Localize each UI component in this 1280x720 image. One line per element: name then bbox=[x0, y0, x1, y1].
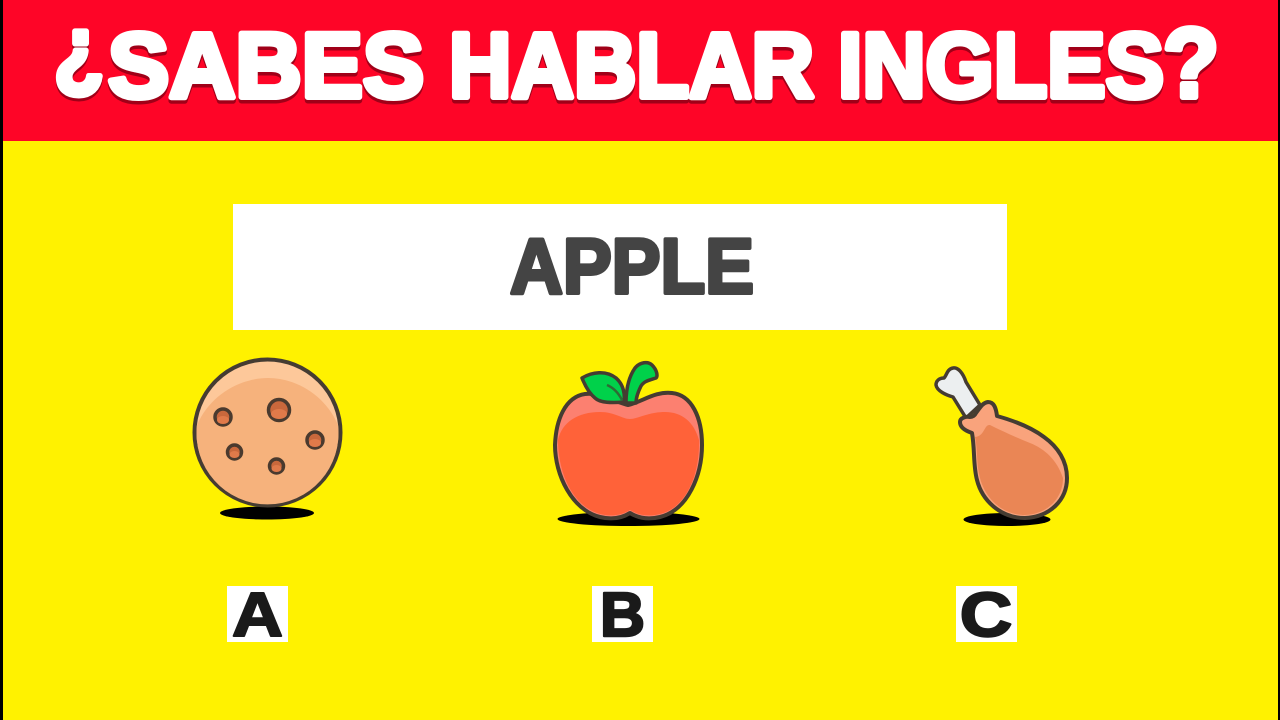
title shadow bbox=[54, 1, 1219, 122]
drumstick bbox=[960, 402, 1067, 518]
bone bbox=[936, 368, 980, 418]
option B: apple icon bbox=[555, 363, 702, 526]
word panel bbox=[233, 204, 1007, 330]
option label B: B bbox=[600, 581, 645, 650]
title shadow: ¿ bbox=[54, 1, 104, 103]
title: INGLES bbox=[838, 15, 1164, 117]
option C: chicken leg icon bbox=[936, 368, 1067, 526]
title shadow: ? bbox=[1163, 12, 1219, 122]
cookie chips bbox=[215, 400, 323, 473]
apple body bbox=[555, 393, 702, 518]
title: ¿ bbox=[54, 0, 104, 100]
word: APPLE: APPLE bbox=[510, 222, 754, 310]
title: HABLAR bbox=[449, 15, 814, 117]
title shadow: INGLES bbox=[838, 18, 1164, 120]
title: SABES bbox=[108, 15, 424, 117]
option label C: C bbox=[960, 581, 1012, 650]
option A: cookie icon bbox=[194, 360, 340, 520]
header banner bbox=[3, 0, 1278, 141]
title shadow: HABLAR bbox=[449, 18, 814, 120]
title: ? bbox=[1163, 8, 1219, 118]
option label A: A bbox=[232, 581, 283, 650]
apple stem bbox=[626, 363, 657, 403]
title shadow: SABES bbox=[108, 18, 424, 120]
apple leaf bbox=[582, 373, 624, 403]
title bbox=[54, 0, 1219, 118]
